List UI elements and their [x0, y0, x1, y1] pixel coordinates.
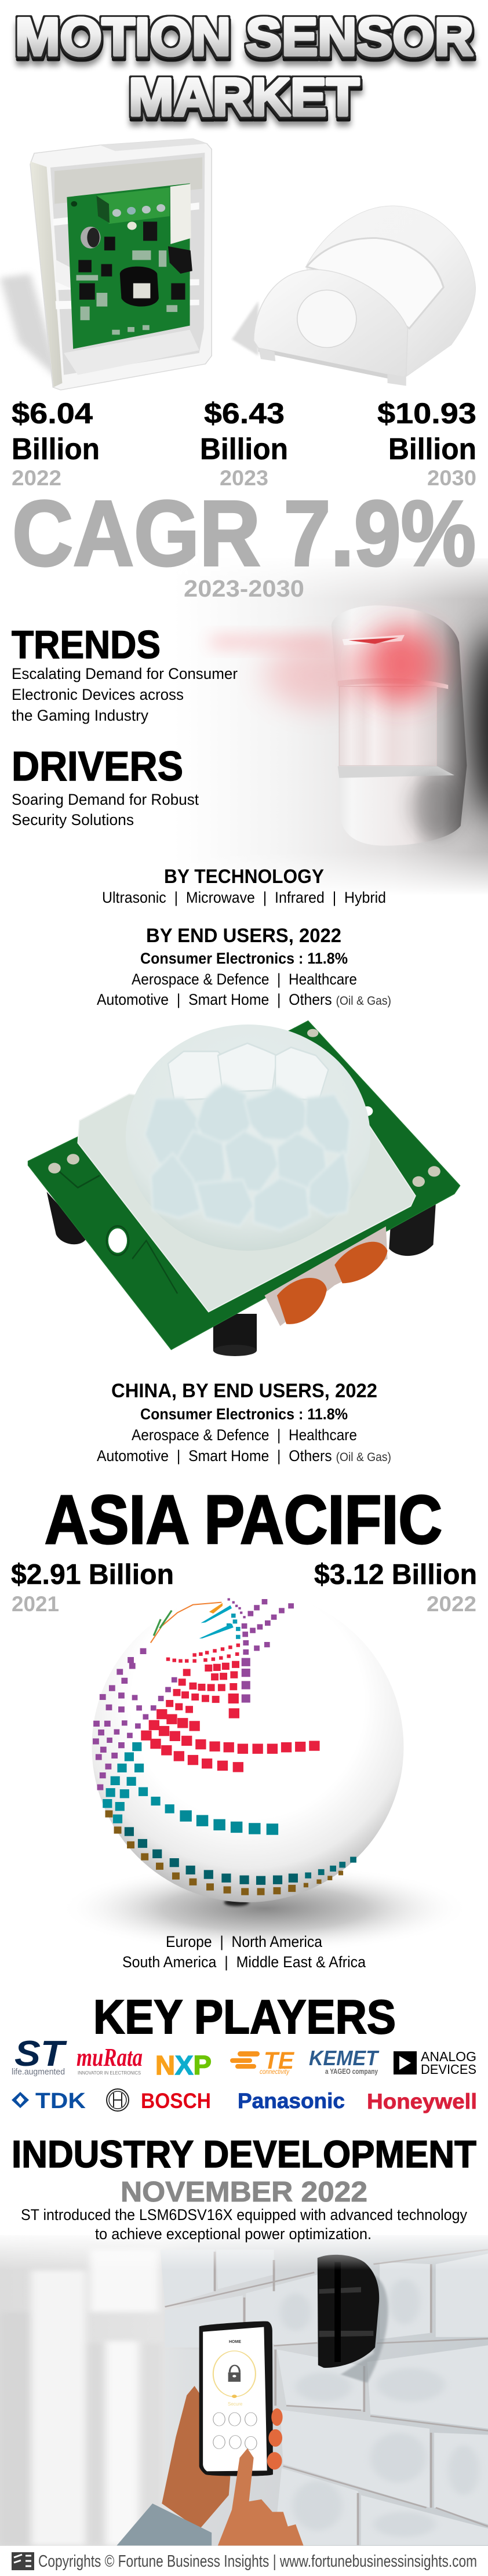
block: drivers: DRIVERS [12, 744, 183, 790]
logo: Panasonic: Panasonic [238, 2089, 345, 2113]
image: opened sensor with circuit board [0, 139, 212, 390]
logo: Honeywell: Honeywell [367, 2090, 477, 2113]
segment: by technology [102, 866, 386, 906]
segment: China by end users 2022: CHINA, BY END USERS, 2022 [111, 1380, 377, 1402]
logo: ST: ST [14, 2034, 68, 2074]
segment: by end users 2022: Automotive | Smart Home | Others (Oil & Gas) [97, 991, 391, 1008]
stat: 2022 market size [12, 397, 100, 490]
logo: TE Connectivity: TE [264, 2047, 295, 2074]
stat: 2030 market size: 2030 [427, 466, 476, 490]
block: trends: Electronic Devices across [12, 686, 184, 703]
title: MARKET [129, 68, 359, 127]
block: trends: TRENDS [12, 623, 161, 667]
stat: 2023 market size: $6.43 [204, 397, 285, 430]
heading: key players: KEY PLAYERS [93, 1990, 396, 2044]
segment: by end users 2022: Consumer Electronics : 11.8% [140, 950, 348, 967]
image: phone controlling wall motion sensor: HOME [229, 2340, 241, 2344]
segment: by end users 2022: Aerospace & Defence | Healthcare [132, 971, 357, 988]
stat: Asia Pacific 2021: $2.91 Billion [11, 1559, 174, 1590]
segment: by technology: Ultrasonic | Microwave | Infrared | Hybrid [102, 889, 386, 906]
block: drivers [12, 744, 199, 829]
segment: China by end users 2022: Aerospace & Defence | Healthcare [132, 1426, 357, 1444]
stat: 2030 market size: $10.93 [377, 397, 476, 430]
segment: by end users 2022 [97, 925, 391, 1008]
stat: 2023 market size: 2023 [220, 466, 268, 490]
logo: ST: life.augmented [12, 2067, 65, 2077]
logo: TDK: TDK [35, 2089, 86, 2113]
other regions list: South America | Middle East & Africa [122, 1953, 366, 1971]
logo: Murata: muRata [77, 2043, 143, 2072]
stat: 2022 market size: Billion [12, 433, 100, 466]
stat: 2023 market size: Billion [200, 433, 288, 466]
logo: TE Connectivity [230, 2047, 295, 2076]
image: white motion sensor housing [232, 206, 476, 386]
logo: NXP: NXP [155, 2050, 212, 2080]
image: phone controlling wall motion sensor [0, 2235, 488, 2546]
other regions list [122, 1933, 366, 1971]
heading: Asia Pacific: ASIA PACIFIC [45, 1481, 442, 1558]
logo: Analog Devices [394, 2049, 476, 2077]
stat: Asia Pacific 2022: $3.12 Billion [314, 1559, 477, 1590]
logo: Murata: INNOVATOR IN ELECTRONICS [78, 2070, 141, 2076]
segment: by technology: BY TECHNOLOGY [164, 866, 324, 888]
image: dotted globe sphere [59, 1591, 470, 1953]
block: drivers: Security Solutions [12, 811, 134, 829]
image: wall sensor with red beam [174, 558, 488, 896]
logo: Bosch: BOSCH [141, 2089, 211, 2113]
block: trends: Escalating Demand for Consumer [12, 665, 238, 682]
segment: China by end users 2022 [97, 1380, 391, 1465]
development date: NOVEMBER 2022 [121, 2177, 367, 2208]
CAGR period: 2023-2030 [184, 575, 304, 602]
stat: 2030 market size: Billion [388, 433, 476, 466]
stat: Asia Pacific 2022: 2022 [427, 1592, 476, 1616]
segment: by end users 2022: BY END USERS, 2022 [146, 925, 341, 947]
stat: Asia Pacific 2021: 2021 [12, 1592, 59, 1616]
statement text: to achieve exceptional power optimization. [95, 2225, 372, 2243]
title [15, 8, 474, 127]
stat: 2023 market size [200, 397, 288, 490]
logo: Bosch [107, 2089, 211, 2113]
statement text [21, 2206, 467, 2243]
stat: Asia Pacific 2022 [314, 1559, 477, 1616]
block: trends [12, 623, 238, 724]
logo: Analog Devices: ANALOG [421, 2049, 476, 2064]
logo: TE Connectivity: connectivity [260, 2068, 290, 2076]
stat: 2022 market size: $6.04 [12, 397, 93, 430]
logo: TDK [12, 2089, 86, 2113]
logo: Analog Devices: DEVICES [421, 2062, 476, 2077]
segment: China by end users 2022: Automotive | Smart Home | Others (Oil & Gas) [97, 1447, 391, 1465]
icon: Fortune Business Insights logo [12, 2552, 34, 2570]
block: drivers: Soaring Demand for Robust [12, 791, 199, 808]
logo: Kemet: a YAGEO company [325, 2067, 378, 2076]
block: trends: the Gaming Industry [12, 707, 148, 724]
title: MOTION SENSOR [15, 8, 474, 67]
logo: Kemet: KEMET [309, 2046, 380, 2070]
image: phone controlling wall motion sensor: Secure [228, 2401, 243, 2407]
stat: 2022 market size: 2022 [12, 466, 61, 490]
stat: 2030 market size [377, 397, 476, 490]
footer band [0, 2546, 488, 2576]
image: PIR sensor module [28, 1021, 460, 1356]
stat: Asia Pacific 2021 [11, 1559, 174, 1616]
segment: China by end users 2022: Consumer Electronics : 11.8% [140, 1405, 348, 1423]
other regions list: Europe | North America [166, 1933, 323, 1950]
